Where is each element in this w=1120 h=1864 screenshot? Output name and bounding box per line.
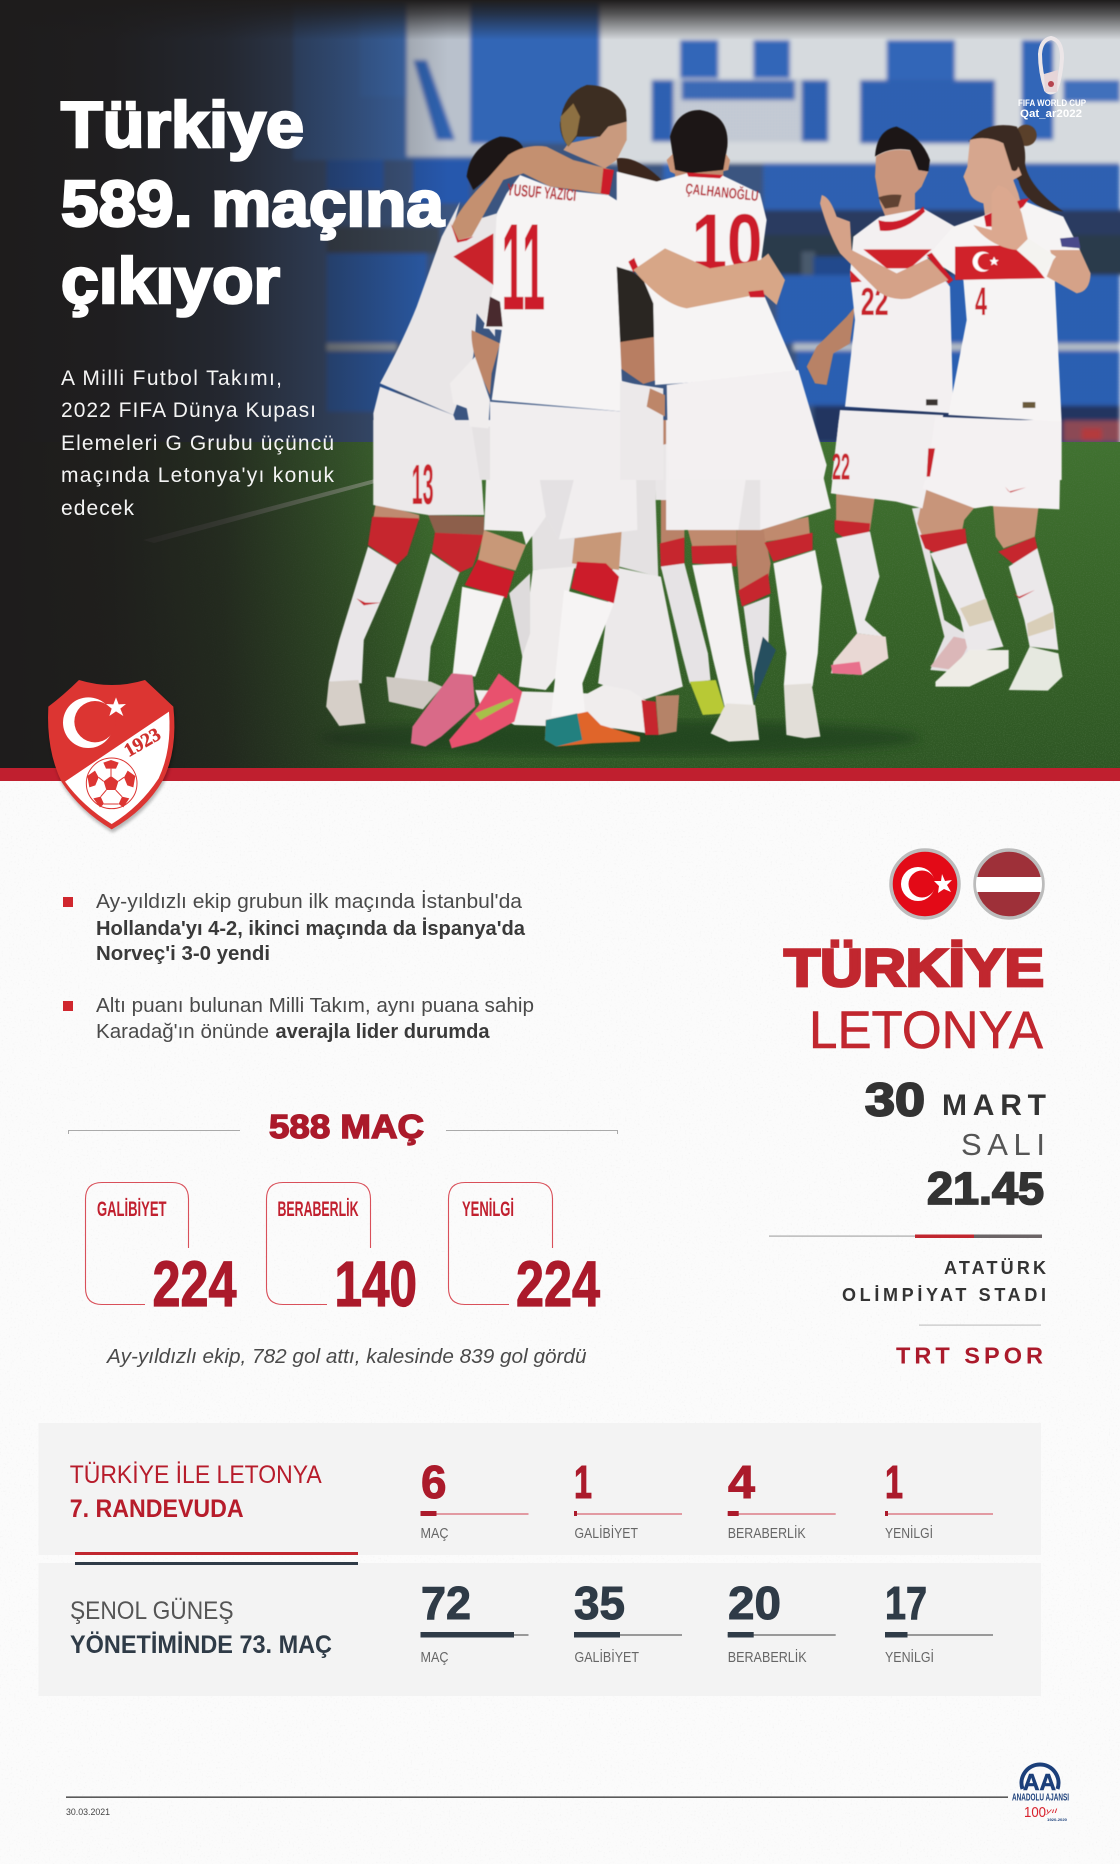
- match info: TRT SPOR: [896, 1342, 1043, 1368]
- football: [86, 758, 137, 809]
- player 11 sleeve and arm: [633, 248, 785, 308]
- lying player: [475, 685, 648, 733]
- bullet 1: [63, 890, 526, 965]
- bullet 2: Altı puanı bulunan Milli Takım, aynı puana sahip: [96, 994, 534, 1017]
- panel: Şenol Güneş record: [38, 1563, 1041, 1696]
- stat: maç 72: 72: [421, 1577, 471, 1629]
- player 10: ÇALHANOĞLU: [685, 179, 759, 205]
- dark overlay: [0, 2, 436, 768]
- panel: Şenol Güneş record: ŞENOL GÜNEŞ: [70, 1597, 234, 1625]
- player 11 legs: [478, 530, 526, 571]
- flags: [891, 850, 1043, 918]
- hero title: çıkıyor: [61, 244, 280, 317]
- player 13 and player 11 upper bodies: YUSUF YAZICI: [506, 180, 577, 205]
- shorts: [373, 420, 484, 515]
- stadium stands: [114, 2, 1120, 442]
- stat: maç 6: 6: [421, 1456, 446, 1508]
- hero photo: Turkish national team players celebrating in the stadium: [0, 0, 1120, 770]
- stat: yenilgi 17: [885, 1577, 993, 1666]
- match info: MART: [942, 1089, 1046, 1122]
- match info: TÜRKİYE: [784, 939, 1044, 998]
- stat card: galibiyet: 224: [152, 1248, 237, 1320]
- logo: FIFA World Cup Qatar 2022: Qat_ar2022: [1020, 108, 1082, 120]
- player 13 and player 11 upper bodies: 13: [412, 454, 434, 517]
- stat: yenilgi 17: YENİLGİ: [885, 1648, 934, 1666]
- hero title: Türkiye: [61, 88, 304, 161]
- player shadow on grass: [320, 720, 920, 756]
- match info: [769, 939, 1046, 1368]
- player 4 legs: [917, 487, 975, 537]
- swooshes: [356, 487, 1035, 605]
- logo: Anadolu Ajansı 100. yıl: 100: [1024, 1804, 1046, 1821]
- player 4: 4: [975, 280, 987, 324]
- stat: maç 72: MAÇ: [420, 1649, 449, 1666]
- goals note: Ay-yıldızlı ekip, 782 gol attı, kalesinde 839 gol gördü: [106, 1346, 586, 1368]
- hero description: [61, 367, 334, 520]
- stat: yenilgi 17: 17: [885, 1577, 927, 1629]
- stat: yenilgi 1: 1: [885, 1456, 903, 1508]
- stat card: beraberlik: 140: [334, 1248, 417, 1320]
- match info: LETONYA: [809, 1001, 1044, 1060]
- centre white body: [531, 479, 659, 577]
- hero title: 589. maçına: [61, 167, 445, 240]
- hero description: 2022 FIFA Dünya Kupası: [61, 399, 316, 422]
- stat: yenilgi 1: [885, 1456, 993, 1542]
- stat card: yenilgi: [448, 1182, 600, 1320]
- player 22 leg: [836, 492, 875, 530]
- heading: 588 MAÇ: 588 MAÇ: [269, 1108, 424, 1145]
- player 4: [820, 125, 1091, 480]
- stat: maç 72: [420, 1577, 528, 1666]
- bullet 2: averajla lider durumda: [276, 1020, 490, 1043]
- player 22: 22: [832, 446, 850, 487]
- stat: yenilgi 1: YENİLGİ: [885, 1524, 933, 1542]
- stat: galibiyet 1: [574, 1456, 682, 1542]
- bullet 2: Karadağ'ın önünde: [96, 1020, 269, 1043]
- raised right hand: [1047, 250, 1091, 293]
- bullet 2: [63, 994, 534, 1043]
- stat: beraberlik 20: BERABERLİK: [728, 1648, 807, 1666]
- panel: Şenol Güneş record: YÖNETİMİNDE 73. MAÇ: [70, 1630, 332, 1659]
- footer date: 30.03.2021: [66, 1807, 110, 1817]
- raised left arm: [820, 195, 948, 299]
- logo: Anadolu Ajansı 100. yıl: [1012, 1764, 1069, 1822]
- player legs and boots: [326, 420, 1063, 748]
- player 13 and player 11 upper bodies: 11: [502, 198, 545, 336]
- red band: [0, 768, 1120, 781]
- heading: 588 MAÇ: [68, 1108, 618, 1145]
- match info: ATATÜRK: [944, 1258, 1046, 1278]
- player 10: [617, 110, 827, 480]
- player 10 legs: [687, 527, 737, 547]
- far leg of player 22 / boots behind: [912, 507, 972, 672]
- stat: beraberlik 4: BERABERLİK: [728, 1524, 806, 1542]
- bullet 1: Hollanda'yı 4-2, ikinci maçında da İspanya'da: [96, 917, 526, 940]
- players: [326, 85, 1091, 748]
- wrapping arm: [452, 146, 613, 240]
- hero title: [61, 88, 445, 317]
- player 11 head: [563, 122, 627, 168]
- stat: maç 6: MAÇ: [420, 1525, 449, 1542]
- player 22: [807, 127, 955, 487]
- player 13 legs: [373, 503, 419, 520]
- emblem: Turkish Football Federation shield: [48, 680, 175, 833]
- hero description: Elemeleri G Grubu üçüncü: [61, 432, 334, 455]
- logo: Anadolu Ajansı 100. yıl: yıl: [1044, 1809, 1058, 1815]
- hero description: A Milli Futbol Takımı,: [61, 367, 282, 390]
- flag: Turkey: [891, 850, 959, 918]
- bullet 1: Ay-yıldızlı ekip grubun ilk maçında İstanbul'da: [96, 890, 523, 913]
- stat: galibiyet 35: [574, 1577, 682, 1666]
- logo: FIFA World Cup Qatar 2022: FIFA WORLD CUP: [1018, 98, 1087, 109]
- stat: beraberlik 4: [728, 1456, 836, 1542]
- stat: galibiyet 1: GALİBİYET: [574, 1524, 638, 1542]
- stat: maç 6: [420, 1456, 528, 1542]
- match info: SALI: [961, 1127, 1045, 1162]
- panel: Türkiye - Letonya head to head: [38, 1423, 1041, 1555]
- emblem: Turkish Football Federation shield: 1923: [121, 724, 165, 762]
- stat card: beraberlik: [266, 1182, 417, 1320]
- player 22: 22: [861, 280, 889, 324]
- hero description: edecek: [61, 497, 134, 520]
- flag: Latvia: [975, 850, 1043, 918]
- double rule between panels: [75, 1552, 358, 1565]
- logo: Anadolu Ajansı 100. yıl: AA: [1023, 1769, 1056, 1795]
- stat card: galibiyet: [86, 1182, 237, 1320]
- stat: beraberlik 20: 20: [728, 1577, 781, 1629]
- stat: galibiyet 35: GALİBİYET: [574, 1648, 639, 1666]
- logo: Anadolu Ajansı 100. yıl: 1920-2020: [1047, 1817, 1068, 1822]
- bullet 1: Norveç'i 3-0 yendi: [96, 942, 270, 965]
- bullet list: [63, 890, 534, 1043]
- match info: OLİMPİYAT STADI: [842, 1285, 1046, 1305]
- stat card: yenilgi: 224: [516, 1248, 600, 1320]
- pink and orange boots: [411, 673, 475, 747]
- panel: Türkiye - Letonya head to head: 7. RANDEVUDA: [70, 1495, 244, 1523]
- logo: FIFA World Cup Qatar 2022: [1018, 38, 1087, 120]
- hero description: maçında Letonya'yı konuk: [61, 464, 334, 487]
- match info: 30: [865, 1074, 925, 1126]
- stat card: yenilgi: YENİLGİ: [462, 1198, 514, 1221]
- stat: galibiyet 1: 1: [574, 1456, 592, 1508]
- logo: Anadolu Ajansı 100. yıl: ANADOLU AJANSI: [1012, 1792, 1069, 1804]
- stat: galibiyet 35: 35: [574, 1577, 625, 1629]
- stat card: galibiyet: GALİBİYET: [97, 1198, 167, 1221]
- player 11 shirt: [482, 174, 635, 412]
- stat card: beraberlik: BERABERLİK: [278, 1198, 358, 1221]
- match info: 21.45: [927, 1163, 1044, 1214]
- player 13 and player 11 upper bodies: [373, 85, 662, 517]
- panel: Türkiye - Letonya head to head: TÜRKİYE İLE LETONYA: [70, 1460, 322, 1489]
- player 10: 10: [692, 197, 762, 286]
- stat: beraberlik 20: [728, 1577, 836, 1666]
- stat: beraberlik 4: 4: [728, 1456, 755, 1508]
